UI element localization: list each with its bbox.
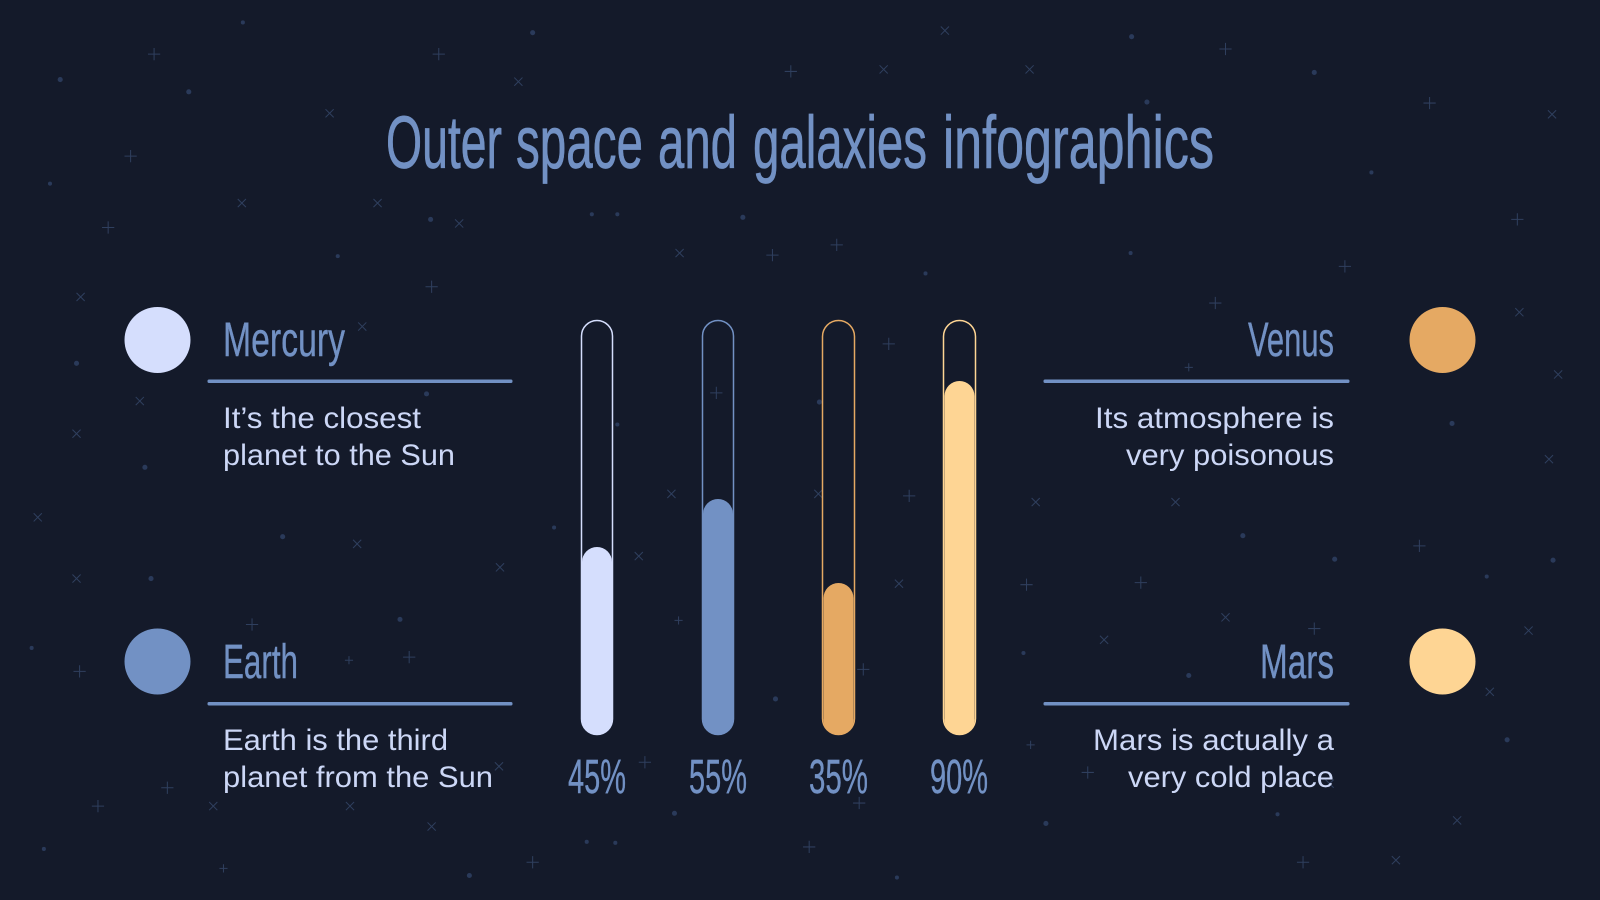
heading: Venus: Venus <box>1248 314 1334 367</box>
chart: Venus 35% tube <box>809 320 868 804</box>
heading: Mars: Mars <box>1260 636 1334 689</box>
panel: Earth <box>124 628 512 794</box>
text: Earth description: planet from the Sun <box>223 761 493 794</box>
title: galaxies <box>753 101 927 184</box>
icon: Mars circle <box>1410 628 1476 694</box>
chart: Mars 90% tube <box>930 320 988 804</box>
title: and <box>658 101 737 184</box>
chart: Earth 55% tube <box>689 320 747 804</box>
chart: Mercury 45% tube <box>568 320 626 804</box>
chart: Venus 35% tube: 35% <box>809 751 868 804</box>
heading: Mercury: Mercury <box>223 314 345 367</box>
panel: Venus <box>1044 307 1476 472</box>
text: Earth description: Earth is the third <box>223 724 448 757</box>
chart: Earth 55% tube: 55% <box>689 751 747 804</box>
text: Venus description: Its atmosphere is <box>1095 402 1334 435</box>
title: Outer <box>386 101 502 184</box>
panel: Mercury <box>124 307 512 472</box>
icon: Venus circle <box>1410 307 1476 373</box>
icon: Mercury circle <box>124 307 190 373</box>
title: space <box>516 101 643 184</box>
text: Mars description: very cold place <box>1128 761 1334 794</box>
text: Mars description: Mars is actually a <box>1093 724 1334 757</box>
title: infographics <box>943 101 1214 184</box>
chart: Mercury 45% tube: 45% <box>568 751 626 804</box>
text: Venus description: very poisonous <box>1126 439 1334 472</box>
text: Mercury description: It’s the closest <box>223 402 422 435</box>
text: Mercury description: planet to the Sun <box>223 439 455 472</box>
icon: Earth circle <box>124 628 190 694</box>
heading: Earth: Earth <box>223 636 298 689</box>
panel: Mars <box>1044 628 1476 794</box>
chart: Mars 90% tube: 90% <box>930 751 988 804</box>
